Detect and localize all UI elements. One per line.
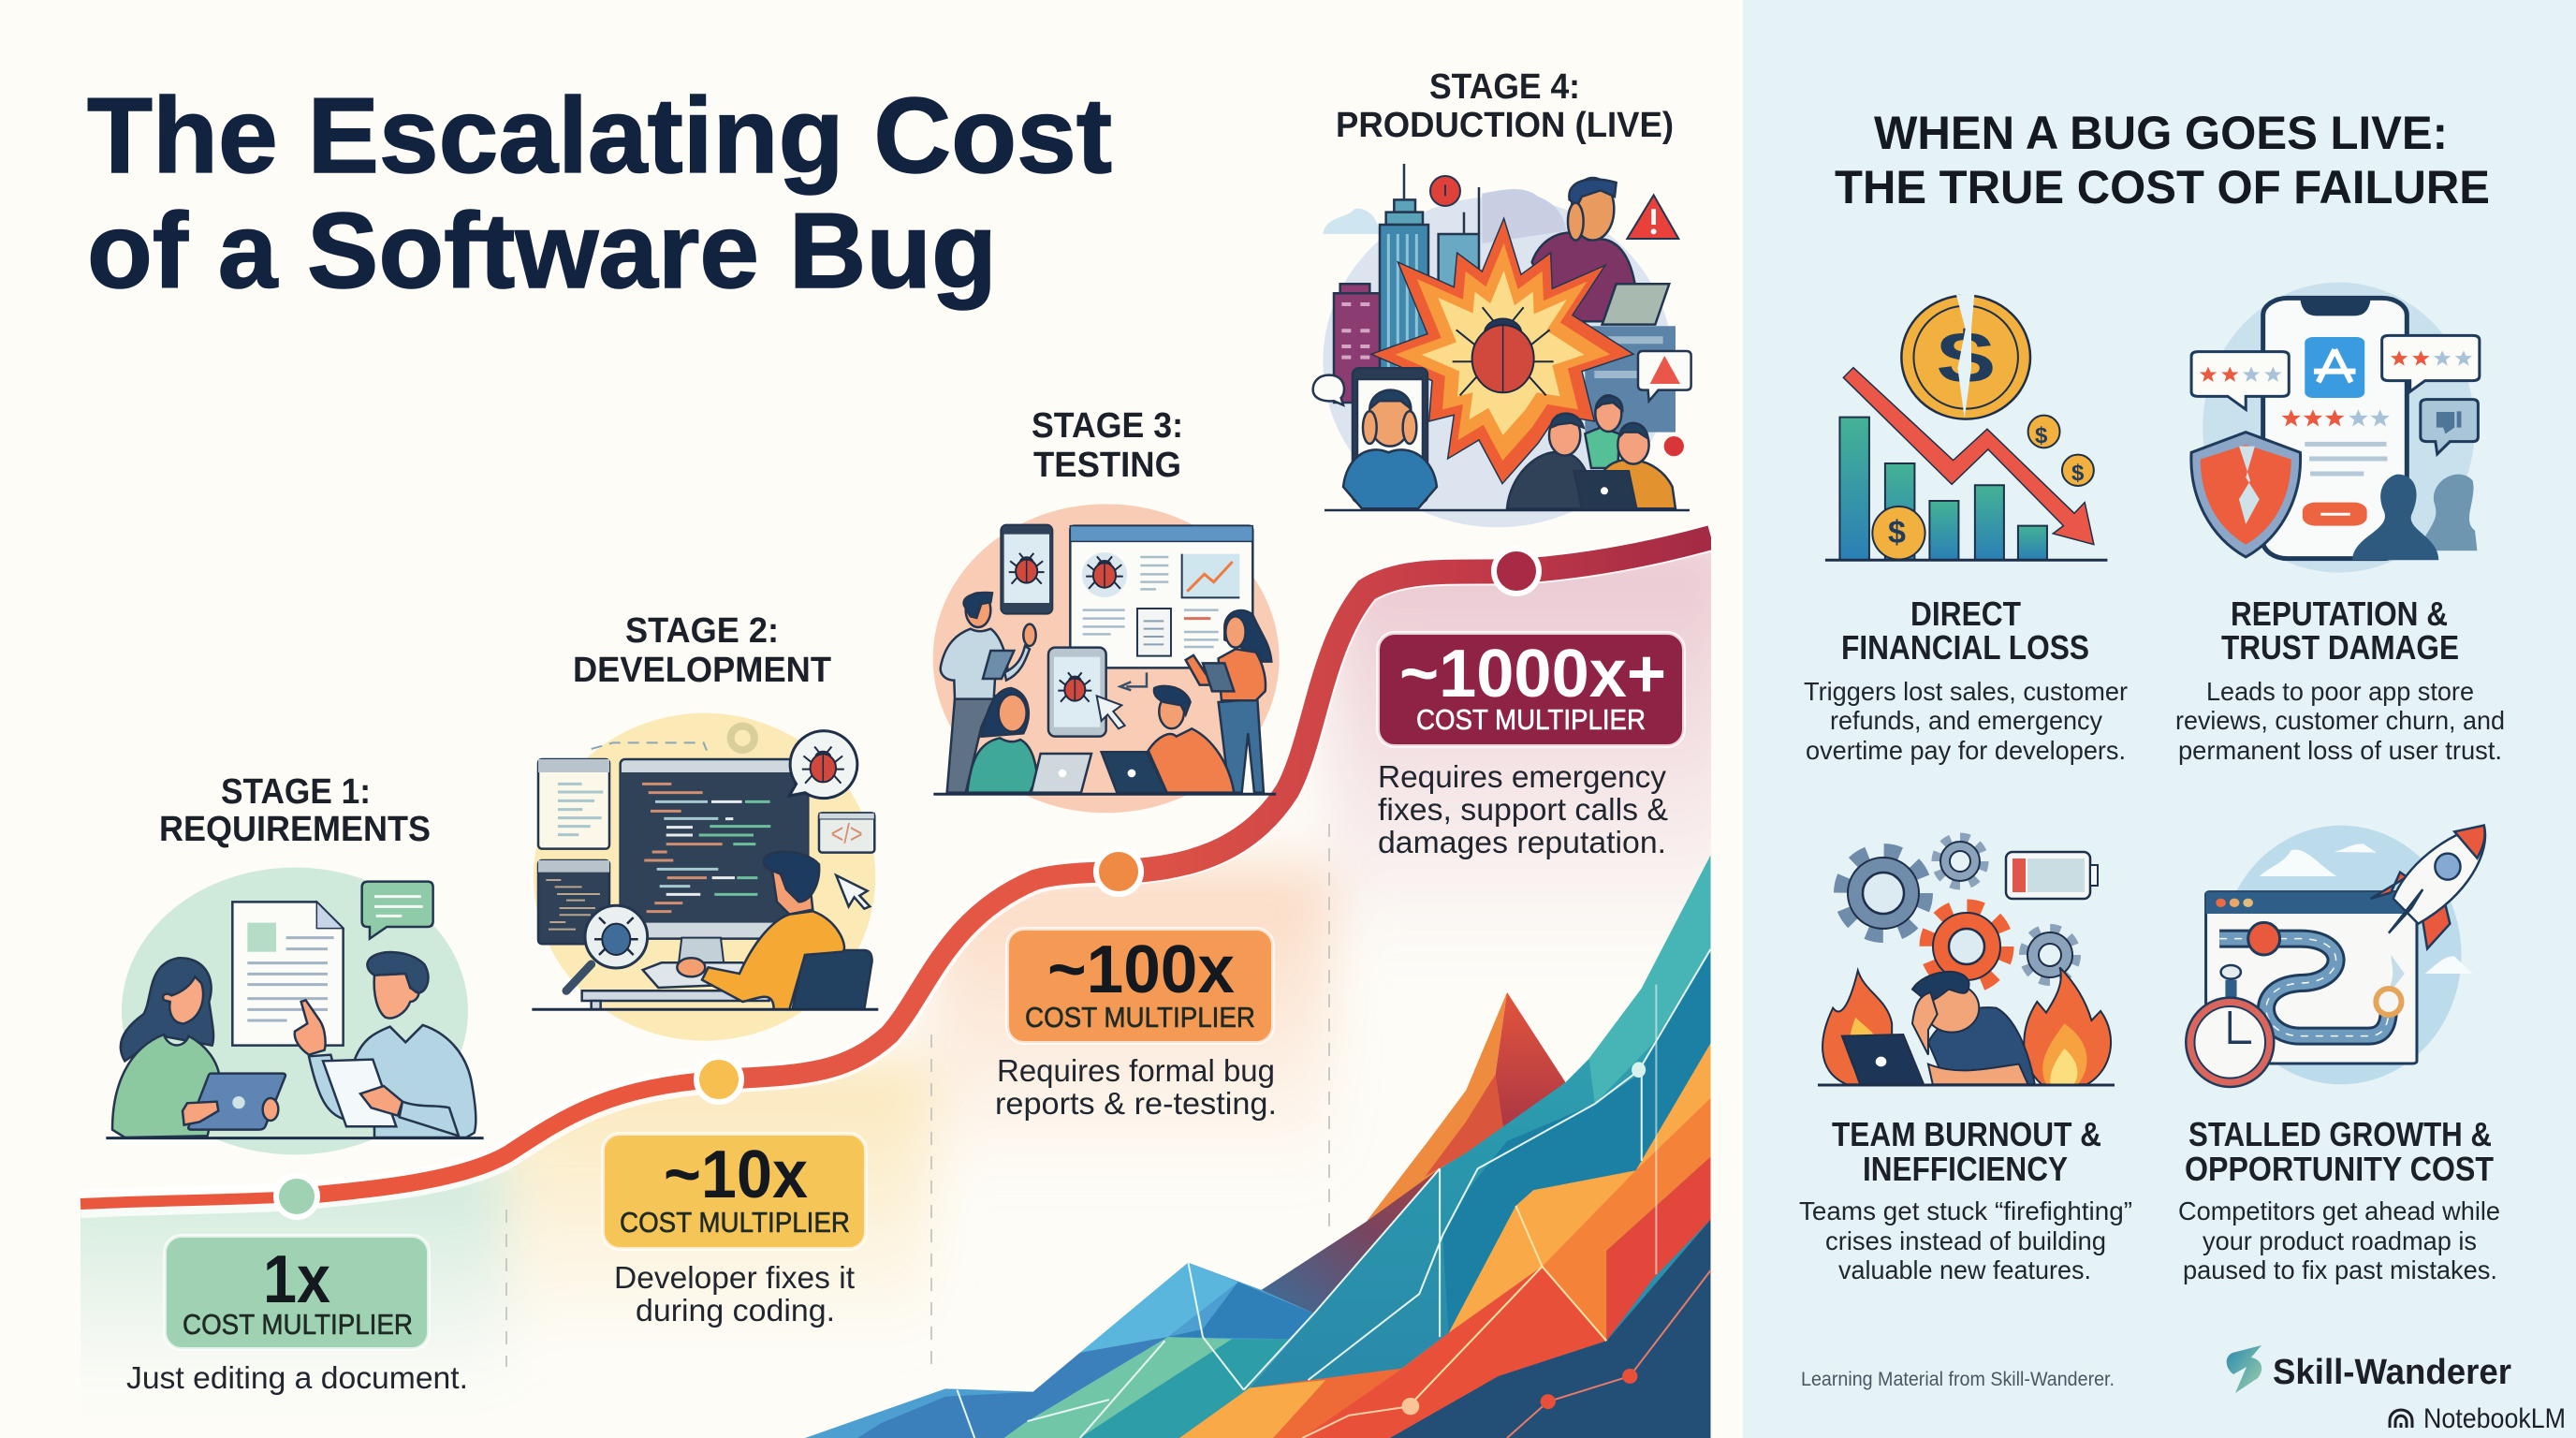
heading: team burnout and inefficiency: INEFFICIENCY xyxy=(1863,1150,2068,1188)
heading: reputation and trust damage: REPUTATION & xyxy=(2231,594,2448,633)
stage 2 marker xyxy=(696,1057,741,1102)
illustration: production explosion xyxy=(1313,164,1691,527)
heading: stalled growth and opportunity cost xyxy=(2185,1115,2494,1188)
clouds xyxy=(1323,209,1379,234)
stage 2 heading xyxy=(573,611,831,690)
standing woman xyxy=(1186,610,1271,793)
cursor xyxy=(836,875,870,909)
badge: ~1000x+: ~1000x+ xyxy=(1399,637,1666,712)
roadmap window xyxy=(2206,892,2417,1064)
stage 4 heading: PRODUCTION (LIVE) xyxy=(1336,106,1674,145)
stage 2 note: during coding. xyxy=(636,1293,835,1328)
text: stalled growth and opportunity cost: your product roadmap is xyxy=(2203,1226,2477,1255)
phone xyxy=(1001,525,1052,614)
thumbs down bubble xyxy=(2421,400,2478,454)
phone xyxy=(2263,298,2407,559)
stage 3 note xyxy=(995,1053,1277,1121)
stage 1 heading: REQUIREMENTS xyxy=(159,810,431,849)
bug alert bubble xyxy=(789,731,857,799)
escalating cost curve xyxy=(80,537,1711,1204)
text: team burnout and inefficiency xyxy=(1799,1196,2132,1284)
stage 4 heading xyxy=(1336,67,1674,145)
footer credit: Learning Material from Skill-Wanderer. xyxy=(1801,1369,2115,1390)
stage 4 note xyxy=(1378,759,1668,859)
illustration: requirements meeting xyxy=(106,868,484,1154)
heading: stalled growth and opportunity cost: STALLED GROWTH & xyxy=(2188,1115,2492,1153)
goal ring xyxy=(2376,989,2401,1015)
stage 1 heading: STAGE 1: xyxy=(221,772,371,812)
document xyxy=(232,902,344,1046)
stage 3 marker xyxy=(1096,849,1141,894)
review bubble right xyxy=(2382,335,2480,391)
badge: ~1000x+: COST MULTIPLIER xyxy=(1416,703,1646,736)
icon: financial loss xyxy=(1825,293,2107,560)
coins xyxy=(1872,416,2094,560)
logo: skill-wanderer mark xyxy=(2227,1345,2261,1393)
broken shield xyxy=(2191,433,2301,557)
icon: reputation damage xyxy=(2191,283,2480,573)
small virus xyxy=(1664,436,1684,456)
text: stalled growth and opportunity cost: paused to fix past mistakes. xyxy=(2183,1255,2497,1284)
heading: stalled growth and opportunity cost: OPPORTUNITY COST xyxy=(2185,1150,2494,1188)
text: team burnout and inefficiency: crises instead of building xyxy=(1825,1226,2106,1255)
test dashboard xyxy=(1070,526,1252,668)
code tag xyxy=(819,813,874,853)
stage 1 marker xyxy=(276,1176,317,1217)
badge: ~10x xyxy=(603,1134,866,1249)
flames xyxy=(1822,967,2111,1084)
right panel title xyxy=(1835,107,2490,213)
man with paper xyxy=(295,952,476,1137)
stage 4 marker xyxy=(1494,549,1539,594)
developer xyxy=(677,852,872,1009)
code tag: </> xyxy=(831,819,863,850)
title: of a Software Bug xyxy=(87,192,997,311)
heading: team burnout and inefficiency: TEAM BURNOUT & xyxy=(1832,1115,2101,1153)
text: reputation and trust damage: reviews, customer churn, and xyxy=(2175,706,2505,735)
stopwatch xyxy=(2186,965,2274,1087)
text: stalled growth and opportunity cost xyxy=(2178,1196,2500,1284)
text: direct financial loss: Triggers lost sales, customer xyxy=(1804,677,2128,706)
warning triangle xyxy=(1627,195,1678,239)
badge: ~10x: ~10x xyxy=(664,1137,808,1212)
starburst xyxy=(1371,218,1633,484)
stage 3 note: reports & re-testing. xyxy=(995,1086,1277,1121)
chat bubble xyxy=(1313,375,1344,405)
desk and keyboard xyxy=(582,962,774,1009)
magnifier xyxy=(566,905,648,990)
stage 3 heading: TESTING xyxy=(1033,446,1181,485)
city buildings xyxy=(1334,164,1479,403)
stage 2 heading: DEVELOPMENT xyxy=(573,651,831,690)
text: reputation and trust damage xyxy=(2175,677,2505,765)
stage 3 heading xyxy=(1032,406,1183,485)
text: direct financial loss: overtime pay for developers. xyxy=(1806,736,2126,765)
stage 4 note: fixes, support calls & xyxy=(1378,792,1668,827)
right server block xyxy=(1585,326,1676,433)
coin dollar signs: $ xyxy=(1888,515,1906,550)
text: team burnout and inefficiency: Teams get stuck “firefighting” xyxy=(1799,1196,2132,1225)
side panels xyxy=(538,759,609,944)
icon: stalled growth xyxy=(2186,826,2485,1087)
stage 1 note: Just editing a document. xyxy=(126,1360,468,1395)
badge: ~100x xyxy=(1007,929,1273,1043)
review bubble left xyxy=(2191,352,2289,409)
background: left cream panel xyxy=(0,0,1743,1438)
icon: notebooklm xyxy=(2390,1410,2412,1428)
title: The Escalating Cost xyxy=(87,77,1112,196)
text: team burnout and inefficiency: valuable new features. xyxy=(1838,1255,2091,1284)
heading: direct financial loss: FINANCIAL LOSS xyxy=(1841,628,2089,667)
team around laptop xyxy=(1507,395,1676,508)
text: direct financial loss: refunds, and emergency xyxy=(1830,706,2102,735)
badge: ~10x: COST MULTIPLIER xyxy=(620,1206,850,1239)
stressed executive xyxy=(1532,178,1635,321)
badge: 1x: 1x xyxy=(263,1242,330,1317)
winding road xyxy=(2219,939,2389,1036)
low battery xyxy=(2006,852,2098,899)
stage 3 heading: STAGE 3: xyxy=(1032,406,1183,446)
broken coin xyxy=(1901,293,2030,419)
stage 2 heading: STAGE 2: xyxy=(625,611,779,651)
badge: ~100x: ~100x xyxy=(1047,932,1235,1007)
stage 4 heading: STAGE 4: xyxy=(1429,67,1580,107)
coin dollar signs xyxy=(1888,423,2085,550)
heading: direct financial loss: DIRECT xyxy=(1910,594,2021,633)
broken coin: $ xyxy=(1938,316,1994,398)
giant bug xyxy=(1453,307,1554,395)
illustration: QA testing team xyxy=(933,504,1280,813)
gears xyxy=(1842,838,2075,986)
icon: team burnout xyxy=(1818,838,2115,1085)
text: reputation and trust damage: permanent loss of user trust. xyxy=(2178,736,2502,765)
speech bubble xyxy=(362,882,433,939)
title xyxy=(87,77,1112,311)
right panel title: WHEN A BUG GOES LIVE: xyxy=(1874,107,2448,159)
falling arrow xyxy=(1843,368,2094,545)
seated woman and laptop xyxy=(967,688,1091,793)
stage 2 note xyxy=(614,1260,855,1328)
coin dollar signs: $ xyxy=(2035,423,2048,448)
illustration: developer at monitor xyxy=(532,713,878,1041)
stage 3 note: Requires formal bug xyxy=(997,1053,1275,1088)
stage 4 note: damages reputation. xyxy=(1378,825,1666,859)
phone with worried person xyxy=(1343,368,1437,508)
tablet xyxy=(1048,648,1125,737)
heading: team burnout and inefficiency xyxy=(1832,1115,2101,1188)
heading: reputation and trust damage xyxy=(2221,594,2459,667)
bars xyxy=(1839,418,2047,560)
stage dividers xyxy=(506,824,1329,1372)
alert pin xyxy=(1430,176,1460,206)
badge: ~100x: COST MULTIPLIER xyxy=(1025,1001,1255,1034)
brand: skill-wanderer: Skill-Wanderer xyxy=(2273,1353,2511,1392)
right panel title: THE TRUE COST OF FAILURE xyxy=(1835,161,2490,213)
text: stalled growth and opportunity cost: Competitors get ahead while xyxy=(2178,1196,2500,1225)
badge: 1x: COST MULTIPLIER xyxy=(183,1308,413,1341)
monitor xyxy=(621,759,808,963)
rocket xyxy=(2371,826,2485,948)
warning bubble xyxy=(1638,351,1691,401)
text: direct financial loss xyxy=(1804,677,2128,765)
background: right pale blue panel xyxy=(1743,0,2576,1438)
roadblock marker xyxy=(2248,922,2280,955)
woman with tablet xyxy=(112,958,285,1137)
seated man and laptop xyxy=(1102,686,1234,793)
lost users xyxy=(2352,475,2477,560)
arrow xyxy=(1120,672,1147,690)
burned out developer xyxy=(1842,972,2035,1084)
stage 1 heading xyxy=(159,772,431,849)
text: reputation and trust damage: Leads to poor app store xyxy=(2206,677,2474,706)
stage 4 note: Requires emergency xyxy=(1378,759,1666,794)
heading: reputation and trust damage: TRUST DAMAGE xyxy=(2221,628,2459,667)
badge: ~1000x+ xyxy=(1378,633,1684,746)
clouds xyxy=(2260,844,2473,974)
stage color washes under curve xyxy=(80,552,1711,1349)
heading: direct financial loss xyxy=(1841,594,2089,667)
coin dollar signs: $ xyxy=(2071,461,2085,486)
stage 2 note: Developer fixes it xyxy=(614,1260,855,1295)
standing man xyxy=(941,593,1036,793)
laptop xyxy=(1603,284,1669,325)
mountain chart backdrop xyxy=(805,855,1711,1438)
badge: 1x xyxy=(165,1236,429,1349)
